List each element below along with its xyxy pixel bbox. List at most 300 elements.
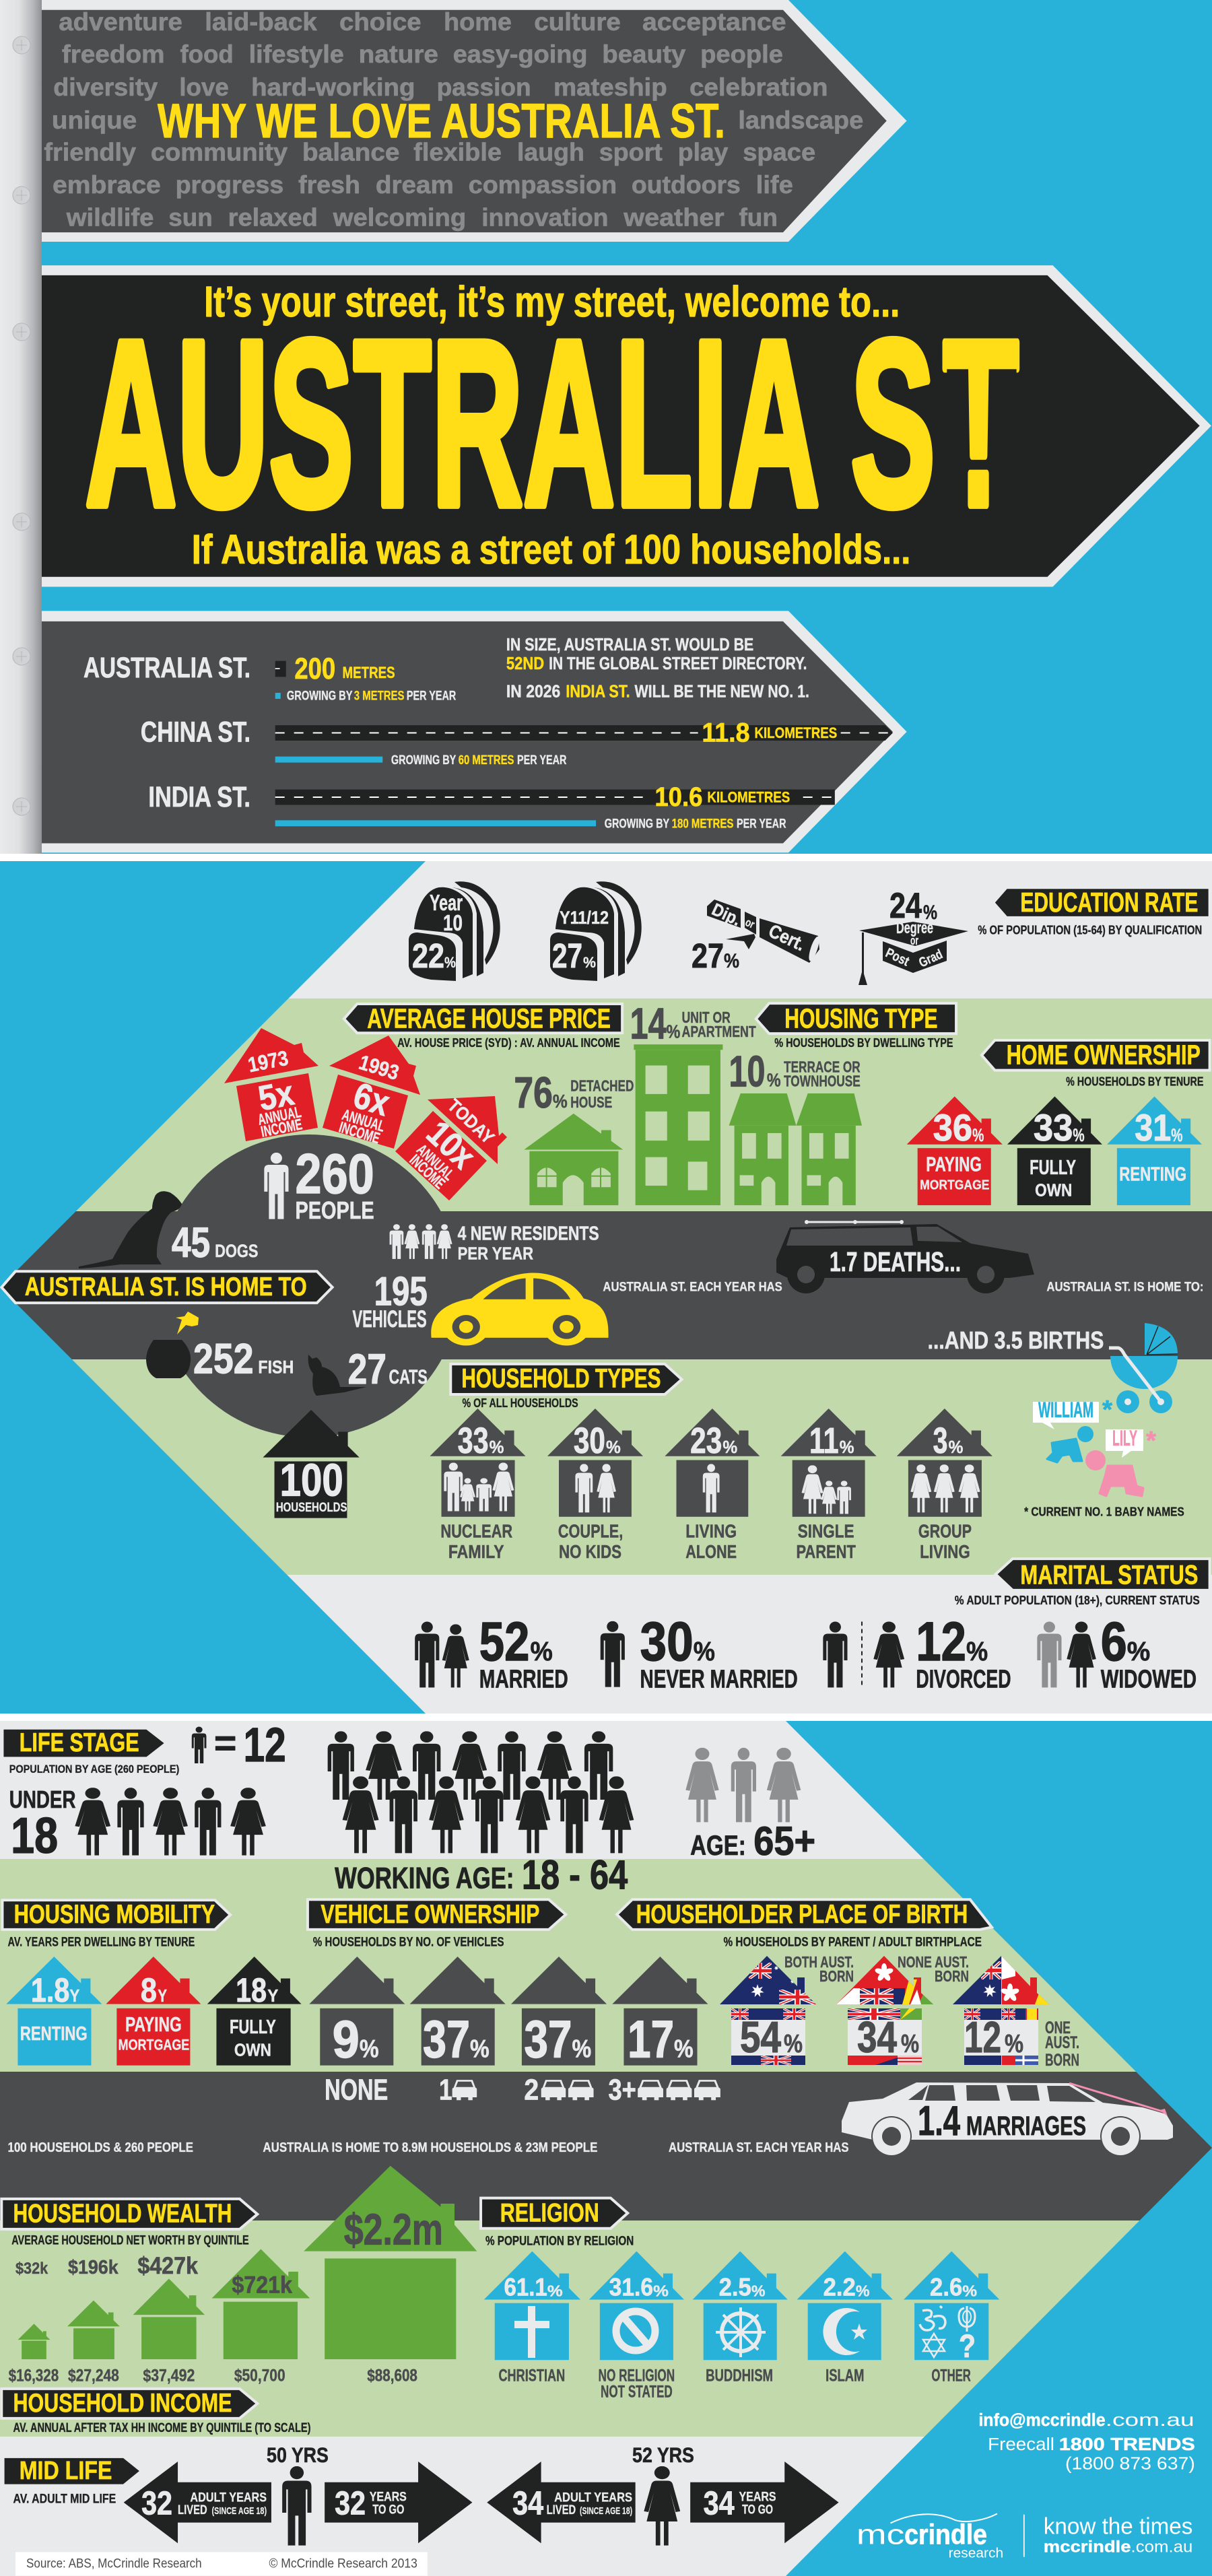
baby names: william: WILLIAM [1038, 1398, 1093, 1422]
demographics panel upper: FULLY [1030, 1155, 1076, 1179]
age 65 plus figures [685, 1748, 815, 1864]
demographics panel upper: AUSTRALIA ST. IS HOME TO [25, 1272, 307, 1301]
lifestyle panel lower: NO RELIGION [599, 2366, 675, 2385]
lifestyle panel lower: BUDDHISM [706, 2366, 773, 2385]
icon: other faith symbols [920, 2306, 976, 2365]
demographics panel lower: HOUSEHOLDS [276, 1500, 347, 1515]
green house: detached: 76 [514, 1069, 553, 1117]
house: one vehicle [409, 1957, 506, 2106]
australia st length row: METRES [343, 664, 395, 682]
icon: backpack year 10 [409, 881, 500, 981]
house: paying mortgage 8 years: 8 [141, 1971, 157, 2009]
flag house: none aust born: 34 [857, 2012, 897, 2062]
icon: crescent and star [823, 2308, 867, 2355]
flag house: one aust born: AUST. [1045, 2033, 1079, 2052]
house: two vehicles: 37 [524, 2010, 572, 2069]
red house: 1973 5x income [224, 1028, 318, 1141]
icon: diploma scroll [692, 899, 821, 975]
icon: other faith symbols: ? [959, 2329, 976, 2365]
china st length row: KILOMETRES [754, 724, 837, 741]
house: single parent [780, 1409, 877, 1562]
red house: 1993 6x income [323, 1036, 420, 1149]
icon: graduation cap: % [923, 902, 937, 924]
logo: mccrindle research: mc [856, 2519, 904, 2550]
house: two vehicles [511, 1957, 607, 2106]
house: fully own: OWN [1035, 1180, 1072, 1200]
house: fully own: % [1073, 1125, 1085, 1145]
house: christian [484, 2251, 580, 2385]
house: other religions: 2.6 [930, 2273, 962, 2301]
banner: australia st is home to [1, 1271, 333, 1303]
house: nuclear family [430, 1409, 526, 1562]
lifestyle panel lower: AV. ANNUAL AFTER TAX HH INCOME BY QUINTILE (TO SCALE) [13, 2420, 310, 2435]
sign: why we love: weather [624, 204, 725, 232]
lifestyle panel lower: HOUSEHOLD WEALTH [13, 2199, 232, 2228]
lifestyle panel upper: PAYING [125, 2012, 182, 2035]
sign: why we love: love [179, 73, 229, 101]
male mid life arrows: 32 [141, 2484, 172, 2521]
sign: why we love: home [444, 8, 512, 36]
stat: divorced: 12 [916, 1611, 966, 1672]
sign: why we love: flexible [413, 138, 502, 166]
lifestyle panel upper: HOUSING MOBILITY [14, 1899, 215, 1929]
red house: 1973 5x income: 5x [255, 1074, 297, 1118]
sign: main title: T [943, 291, 1019, 555]
house: other religions: % [962, 2282, 977, 2299]
stat: divorced [823, 1611, 1011, 1693]
house: paying mortgage 8 years: Y [158, 1986, 167, 2006]
red house: 1993 6x income: INCOME [337, 1118, 382, 1147]
icon: diploma scroll: Cert. [766, 920, 809, 955]
lifestyle panel lower [1, 2166, 1195, 2576]
house: islam: 2.2 [823, 2273, 856, 2301]
banner: vehicle ownership [308, 1899, 566, 1930]
stat: 260 people [264, 1142, 374, 1224]
lifestyle panel lower: RELIGION [500, 2198, 599, 2227]
icon: graduation cap: Grad [916, 947, 945, 970]
sign: why we love: progress [176, 171, 283, 199]
demographics panel lower: NUCLEAR [440, 1520, 512, 1542]
icon: diploma scroll: Dip. [709, 899, 744, 930]
house: two vehicles: % [572, 2035, 591, 2063]
icon: backpack year 11/12 [550, 881, 642, 981]
flag house: both aust born: BORN [819, 1967, 854, 1985]
baby names: lily: LILY [1112, 1426, 1137, 1450]
sign: why we love: sun [168, 204, 213, 232]
sign: why we love: freedom [62, 40, 165, 68]
australia st length row: 200 [294, 652, 335, 685]
icon: no religion sign [616, 2311, 655, 2350]
sign: why we love: friendly [44, 138, 136, 166]
lifestyle panel upper [2, 1718, 992, 2155]
lifestyle panel lower: $50,700 [234, 2366, 285, 2385]
house: top quintile 2.2m [304, 2166, 477, 2385]
demographics panel upper: UNIT OR [682, 1009, 731, 1026]
house: other religions [904, 2251, 999, 2385]
india st length row: INDIA ST. [148, 780, 250, 813]
logo: mccrindle research [856, 2513, 1025, 2561]
male mid life arrows [124, 2443, 472, 2546]
demographics panel lower: 52 [479, 1611, 529, 1672]
demographics panel upper: PAYING [926, 1153, 982, 1176]
sign: why we love: fresh [298, 171, 360, 199]
red house: 1993 6x income: 6x [349, 1075, 394, 1124]
icon: diploma scroll: or [743, 916, 757, 931]
flag house: both aust born [720, 1953, 854, 2065]
house: top quintile 2.2m: $88,608 [367, 2366, 417, 2385]
under 18 figures [9, 1786, 266, 1864]
lifestyle panel upper: NONE [325, 2074, 388, 2106]
red house: 1973 5x income: INCOME [259, 1115, 304, 1141]
sign: why we love: laid-back [205, 8, 317, 36]
demographics panel upper: AUSTRALIA ST. EACH YEAR HAS [603, 1279, 782, 1294]
green houses: terrace [729, 1047, 862, 1205]
house: one vehicle: 37 [423, 2010, 470, 2069]
footnotes on dark band [7, 2140, 849, 2155]
china st length row: 60 METRES [459, 753, 514, 768]
female mid life arrows: LIVED [547, 2502, 576, 2517]
baby names: william: * [1102, 1396, 1112, 1424]
banner: household wealth [1, 2199, 257, 2229]
stat: 252 fish [193, 1335, 294, 1382]
house: living alone: 23 [690, 1420, 722, 1460]
red house: 1973 5x income: ANNUAL [257, 1103, 302, 1128]
india st length row: GROWING BY [605, 817, 669, 832]
stat: never married: 30 [640, 1611, 694, 1672]
india st length row: KILOMETRES [707, 789, 790, 805]
house: fully own 18 years [207, 1957, 302, 2066]
house: islam [797, 2251, 893, 2385]
icon: diploma scroll: 27 [692, 937, 724, 975]
red house: today 10x income: ANNUAL [413, 1141, 458, 1184]
demographics panel lower: MARRIED [479, 1664, 568, 1693]
female mid life arrows: 34 [704, 2484, 735, 2521]
house: three plus vehicles: 17 [628, 2010, 674, 2069]
sign: why we love: mateship [553, 73, 667, 101]
icon: limo with marriages [842, 2082, 1173, 2157]
demographics panel upper: DOGS [215, 1241, 258, 1261]
house: fully own: 33 [1034, 1107, 1073, 1149]
red house: 1973 5x income: 1973 [246, 1046, 290, 1077]
demographics panel lower: LIVING [920, 1541, 970, 1562]
red house: 1993 6x income: 1993 [356, 1050, 402, 1085]
lifestyle panel lower: AVERAGE HOUSEHOLD NET WORTH BY QUINTILE [11, 2233, 249, 2247]
red house: today 10x income: 10x [419, 1114, 483, 1177]
house: fully own 18 years: OWN [234, 2040, 271, 2060]
section bands: lifestyle wedge [0, 1721, 1212, 2576]
female mid life arrows [487, 2443, 839, 2546]
house: three plus vehicles [608, 1957, 720, 2106]
australia st length row: PER YEAR [407, 688, 456, 703]
demographics panel lower: FISH [258, 1357, 294, 1377]
icon: cross [514, 2306, 549, 2358]
baby names: lily [1085, 1426, 1156, 1496]
red house: 1993 6x income: ANNUAL [340, 1106, 387, 1135]
size comparison note: 52ND [506, 653, 544, 673]
houses: wealth and income quintiles: $27,248 [68, 2366, 119, 2385]
banner: housing mobility [2, 1899, 230, 1930]
china st length row: CHINA ST. [141, 716, 250, 748]
sign: street lengths [42, 611, 907, 852]
contact details [978, 2410, 1195, 2473]
house: 100 households [263, 1410, 360, 1518]
sign: why we love: easy-going [453, 40, 587, 68]
sign: why we love: choice [339, 8, 422, 36]
sign: why we love: outdoors [632, 171, 741, 199]
flag house: none aust born [836, 1953, 969, 2065]
male mid life arrows: YEARS [370, 2489, 407, 2504]
male mid life arrows: (SINCE AGE 18) [212, 2505, 267, 2516]
india st length row [148, 780, 835, 832]
legend: person equals 12: = [214, 1723, 236, 1763]
stat: married [415, 1611, 568, 1693]
lifestyle panel lower: CHRISTIAN [498, 2366, 565, 2385]
demographics panel lower: 100 [280, 1455, 343, 1505]
demographics panel upper: APARTMENT [682, 1023, 756, 1040]
red house: today 10x income [395, 1095, 507, 1200]
stat: vehicles with yellow car [352, 1268, 609, 1346]
australia st length row [83, 652, 456, 703]
sign: why we love: fun [739, 204, 778, 232]
sign: why we love: balance [302, 138, 400, 166]
lifestyle panel lower: $2.2m [344, 2205, 443, 2254]
banner: average house price [344, 1003, 622, 1033]
sign: why we love: space [743, 138, 815, 166]
stat: widowed: 6 [1101, 1611, 1127, 1672]
icon: limo with marriages: 1.4 [918, 2098, 960, 2144]
icon: hearse car [776, 1220, 1034, 1293]
house: nuclear family: % [490, 1437, 504, 1457]
female mid life arrows: 52 YRS [632, 2443, 694, 2467]
green building: apartment: 14 [630, 999, 667, 1048]
section bands: demographics wedge [0, 861, 1212, 1714]
icon: graduation cap: Post [883, 945, 912, 970]
working age figures [328, 1731, 634, 1853]
icon: backpack year 10: Year [430, 890, 463, 915]
demographics panel lower: LIVING [685, 1520, 737, 1542]
house: renting 1.8 years [6, 1957, 102, 2066]
lifestyle panel lower: AV. ADULT MID LIFE [13, 2491, 116, 2506]
lifestyle panel lower: MID LIFE [20, 2456, 112, 2484]
house: fully own 18 years: Y [267, 1986, 278, 2006]
age 65 plus figures: AGE: [690, 1830, 746, 1861]
demographics panel lower: PARENT [796, 1541, 856, 1562]
house: single parent: 11 [809, 1420, 839, 1460]
houses: wealth and income quintiles: $32k [15, 2259, 48, 2277]
size comparison note: IN THE GLOBAL STREET DIRECTORY. [549, 653, 807, 673]
demographics panel upper: MORTGAGE [920, 1177, 989, 1192]
china st length row: 11.8 [702, 718, 750, 748]
under 18 figures: 18 [11, 1808, 58, 1864]
houses: wealth and income quintiles: $196k [68, 2256, 119, 2278]
house: one vehicle: 1 [439, 2074, 452, 2106]
banner: religion [481, 2198, 628, 2229]
stat: new residents [390, 1222, 599, 1263]
stat: never married [601, 1611, 798, 1693]
demographics panel upper: TERRACE OR [784, 1058, 861, 1075]
icon: hearse car: 1.7 DEATHS... [830, 1246, 961, 1277]
lifestyle panel lower: HOUSEHOLD INCOME [13, 2388, 232, 2418]
icon: goldfish [176, 1312, 199, 1334]
house: christian: % [547, 2282, 563, 2299]
sign: why we love: diversity [53, 73, 158, 101]
flag house: none aust born: % [901, 2030, 919, 2058]
house: no vehicles [309, 1957, 405, 2106]
icon: diploma scroll: % [724, 950, 739, 972]
house: buddhism: 2.5 [719, 2273, 751, 2301]
icon: backpack year 11/12: % [583, 954, 596, 971]
icon: backpack year 11/12: Y11/12 [560, 908, 609, 928]
australia st length row: AUSTRALIA ST. [83, 652, 250, 683]
lifestyle panel lower: ISLAM [826, 2366, 864, 2385]
house: couple no kids: % [606, 1437, 621, 1457]
sign: why we love: welcoming [333, 204, 466, 232]
stat: widowed: % [1127, 1636, 1150, 1666]
heading: working age [335, 1852, 628, 1898]
lifestyle panel upper: FULLY [230, 2016, 276, 2037]
house: renting 1.8 years: Y [69, 1986, 79, 2006]
stat: divorced: % [966, 1636, 988, 1666]
red house: today 10x income: TODAY [444, 1095, 498, 1148]
lifestyle panel upper: WORKING AGE: [335, 1862, 514, 1895]
china st length row: GROWING BY [391, 753, 456, 768]
house: buddhism [693, 2251, 788, 2385]
tagline: know the times [1044, 2513, 1192, 2556]
green houses: terrace: % [767, 1069, 780, 1091]
sign: why we love: adventure [59, 8, 182, 36]
lifestyle panel lower: crindle [904, 2519, 987, 2550]
icon: dog [79, 1191, 182, 1268]
house: group living: % [949, 1437, 963, 1457]
demographics panel lower: NO KIDS [559, 1541, 621, 1562]
sign: why we love: celebration [689, 73, 828, 101]
green houses: terrace: 10 [729, 1047, 766, 1096]
demographics panel upper: DETACHED [570, 1077, 634, 1095]
male mid life arrows: 50 YRS [267, 2443, 329, 2467]
houses: wealth and income quintiles: $37,492 [143, 2366, 195, 2385]
sign: why we love: unique [52, 106, 137, 134]
heading: why we love australia st: WHY WE LOVE AUSTRALIA ST. [158, 95, 725, 148]
red house: today 10x income: INCOME [406, 1151, 449, 1192]
demographics panel lower: % OF ALL HOUSEHOLDS [463, 1396, 578, 1410]
sign: why we love: innovation [481, 204, 608, 232]
male mid life arrows: LIVED [178, 2502, 207, 2517]
female mid life arrows: ADULT YEARS [554, 2490, 632, 2505]
demographics panel lower: COUPLE, [558, 1520, 623, 1542]
sign: why we love: lifestyle [249, 40, 344, 68]
lifestyle panel lower: OTHER [931, 2366, 971, 2385]
lifestyle panel upper: AV. YEARS PER DWELLING BY TENURE [7, 1934, 195, 1949]
size comparison note: IN 2026 [506, 681, 560, 701]
flag house: one aust born: % [1005, 2030, 1023, 2058]
female mid life arrows: YEARS [739, 2489, 776, 2504]
house: renting 1.8 years: 1.8 [31, 1971, 69, 2009]
house: group living: 3 [933, 1420, 947, 1460]
demographics panel upper: 4 NEW RESIDENTS [458, 1222, 599, 1244]
lifestyle panel lower: NOT STATED [601, 2382, 673, 2401]
house: couple no kids [547, 1409, 643, 1562]
lifestyle panel upper: 65+ [753, 1819, 815, 1864]
demographics panel upper [1, 887, 1210, 1346]
house: paying mortgage: % [972, 1125, 984, 1145]
icon: fish bowl [146, 1340, 191, 1378]
house: no religion: % [653, 2282, 669, 2299]
stat: vehicles with yellow car: 195 [374, 1268, 428, 1314]
female mid life arrows: TO GO [742, 2502, 773, 2517]
flag house: none aust born: BORN [935, 1967, 969, 1985]
icon: graduation cap: 24 [889, 886, 922, 926]
demographics panel upper: AV. HOUSE PRICE (SYD) : AV. ANNUAL INCOME [397, 1036, 620, 1050]
sign: why we love: sport [599, 138, 663, 166]
demographics panel lower: SINGLE [798, 1520, 854, 1542]
size comparison note [506, 634, 809, 701]
demographics panel upper: TOWNHOUSE [784, 1073, 861, 1090]
demographics panel lower [193, 1327, 1210, 1693]
under 18 figures: UNDER [9, 1786, 76, 1813]
house: two vehicles: 2 [524, 2074, 539, 2106]
banner: housing type [756, 1003, 956, 1033]
size comparison note: INDIA ST. [566, 681, 630, 701]
footnotes on dark band: 100 HOUSEHOLDS & 260 PEOPLE [7, 2140, 193, 2155]
green building: apartment [630, 999, 756, 1205]
icon: backpack year 10: 10 [443, 910, 463, 935]
green house: detached: % [553, 1090, 568, 1112]
demographics panel lower: 252 [193, 1335, 254, 1382]
lifestyle panel upper: MORTGAGE [119, 2037, 189, 2054]
icon: backpack year 10: % [444, 954, 456, 971]
australia st length row: GROWING BY [287, 688, 353, 703]
sign: main title: ! [959, 291, 999, 555]
house: no religion [589, 2251, 684, 2401]
stat: vehicles with yellow car: VEHICLES [352, 1306, 427, 1332]
house: group living [897, 1409, 992, 1562]
female mid life arrows: (SINCE AGE 18) [580, 2505, 632, 2516]
sign: why we love: life [756, 171, 793, 199]
icon: limo with marriages: MARRIAGES [966, 2111, 1086, 2141]
sign: why we love: community [151, 138, 288, 166]
sign post with screws [0, 0, 42, 854]
green house: detached [514, 1069, 634, 1205]
lifestyle panel lower: % POPULATION BY RELIGION [485, 2233, 634, 2248]
icon: pram [1109, 1323, 1178, 1413]
sign: why we love [42, 0, 907, 242]
lifestyle panel upper: % HOUSEHOLDS BY NO. OF VEHICLES [313, 1934, 504, 1949]
demographics panel lower: GROUP [918, 1520, 972, 1542]
baby names: lily: * [1146, 1427, 1156, 1455]
sign: why we love: wildlife [66, 204, 154, 232]
banner: life stage [2, 1728, 166, 1758]
house: no religion: 31.6 [609, 2273, 653, 2301]
lifestyle panel upper: RENTING [20, 2023, 88, 2044]
sign: why we love: play [678, 138, 728, 166]
china st length row: PER YEAR [517, 753, 566, 768]
china st length row [141, 716, 893, 768]
female mid life arrows: 34 [512, 2484, 543, 2521]
flag house: one aust born: 12 [964, 2012, 1001, 2062]
demographics panel upper: PEOPLE [296, 1197, 374, 1224]
sign: why we love: nature [359, 40, 438, 68]
sign: why we love: culture [534, 8, 621, 36]
source box [15, 2552, 428, 2576]
banner: household types [450, 1363, 682, 1394]
house: paying mortgage [907, 1096, 1003, 1205]
size comparison note: WILL BE THE NEW NO. 1. [635, 681, 809, 701]
sign: why we love: laugh [517, 138, 584, 166]
icon: dharma wheel [716, 2307, 766, 2357]
flag house: both aust born: 54 [740, 2012, 781, 2062]
demographics panel upper: 260 [296, 1142, 374, 1205]
sign: why we love: hard-working [251, 73, 415, 101]
